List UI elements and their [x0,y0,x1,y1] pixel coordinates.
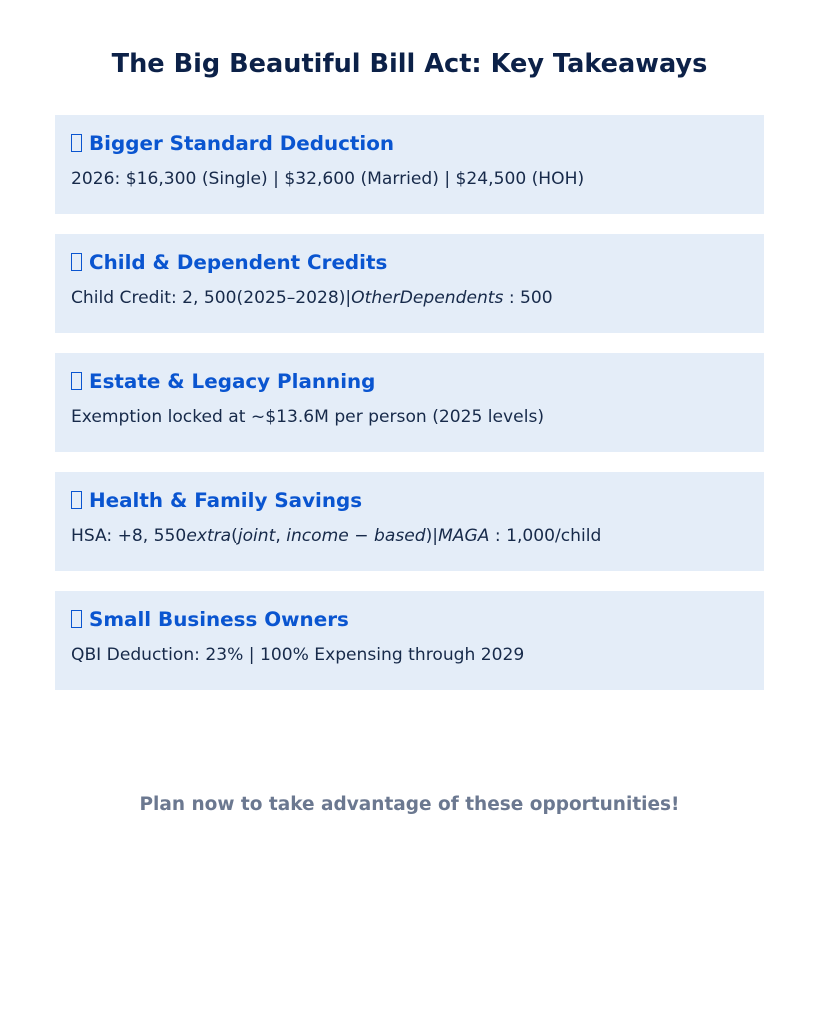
text: Child Credit: 2, 500(2025–2028)|OtherDependents : 500 [71,288,553,308]
heading: Small Business Owners [89,608,349,631]
panel: standard deduction [55,115,764,214]
title: The Big Beautiful Bill Act: Key Takeaways [112,49,707,79]
text: Exemption locked at ~$13.6M per person (2025 levels) [71,407,544,427]
panel: small business [55,591,764,690]
text: 2026: $16,300 (Single) | $32,600 (Married) | $24,500 (HOH) [71,169,584,189]
footer: Plan now to take advantage of these opportunities! [139,794,680,815]
text: HSA: +8, 550extra(joint, income − based)|MAGA : 1,000/child [71,526,601,546]
text: QBI Deduction: 23% | 100% Expensing through 2029 [71,645,524,665]
heading: Estate & Legacy Planning [89,370,375,393]
heading: Health & Family Savings [89,489,362,512]
heading: Child & Dependent Credits [89,251,387,274]
panel: child credits [55,234,764,333]
panel: estate [55,353,764,452]
heading: Bigger Standard Deduction [89,132,394,155]
panel: health [55,472,764,571]
